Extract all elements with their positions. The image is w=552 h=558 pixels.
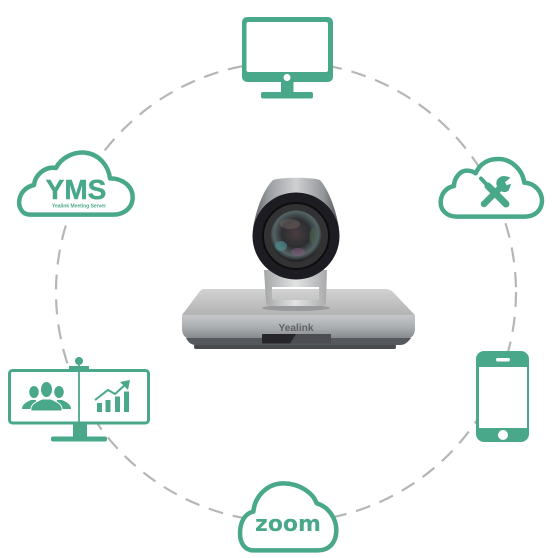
icon: zoom cloud: [240, 483, 336, 550]
lens housing: [252, 192, 340, 280]
codec base: [182, 289, 415, 349]
icon: presentation display: [10, 357, 148, 442]
lens glass: [270, 210, 322, 262]
dashed connection ring: [56, 62, 516, 522]
growth chart icon: [95, 380, 130, 412]
logo wordmark: Yealink: [278, 323, 314, 334]
camera barrel: [253, 178, 339, 228]
camera on display: [69, 357, 89, 370]
people icon: [22, 382, 71, 411]
screwdriver: [481, 178, 506, 204]
icon: desktop monitor: [242, 17, 333, 98]
icon: tools cloud: [441, 159, 542, 217]
icon: YMS cloud: [19, 153, 133, 215]
Yealink Meeting Server label: Yealink Meeting Server: [52, 204, 107, 210]
wrench: [484, 177, 510, 204]
zoom label: zoom: [255, 512, 321, 537]
camera bracket: [264, 270, 327, 306]
lens reflections: [275, 219, 316, 256]
lens ring: [263, 203, 329, 269]
display stand: [51, 424, 107, 442]
product: Yealink camera and codec: [182, 178, 415, 349]
icon: smartphone: [476, 351, 529, 442]
YMS label: YMS: [46, 174, 106, 205]
